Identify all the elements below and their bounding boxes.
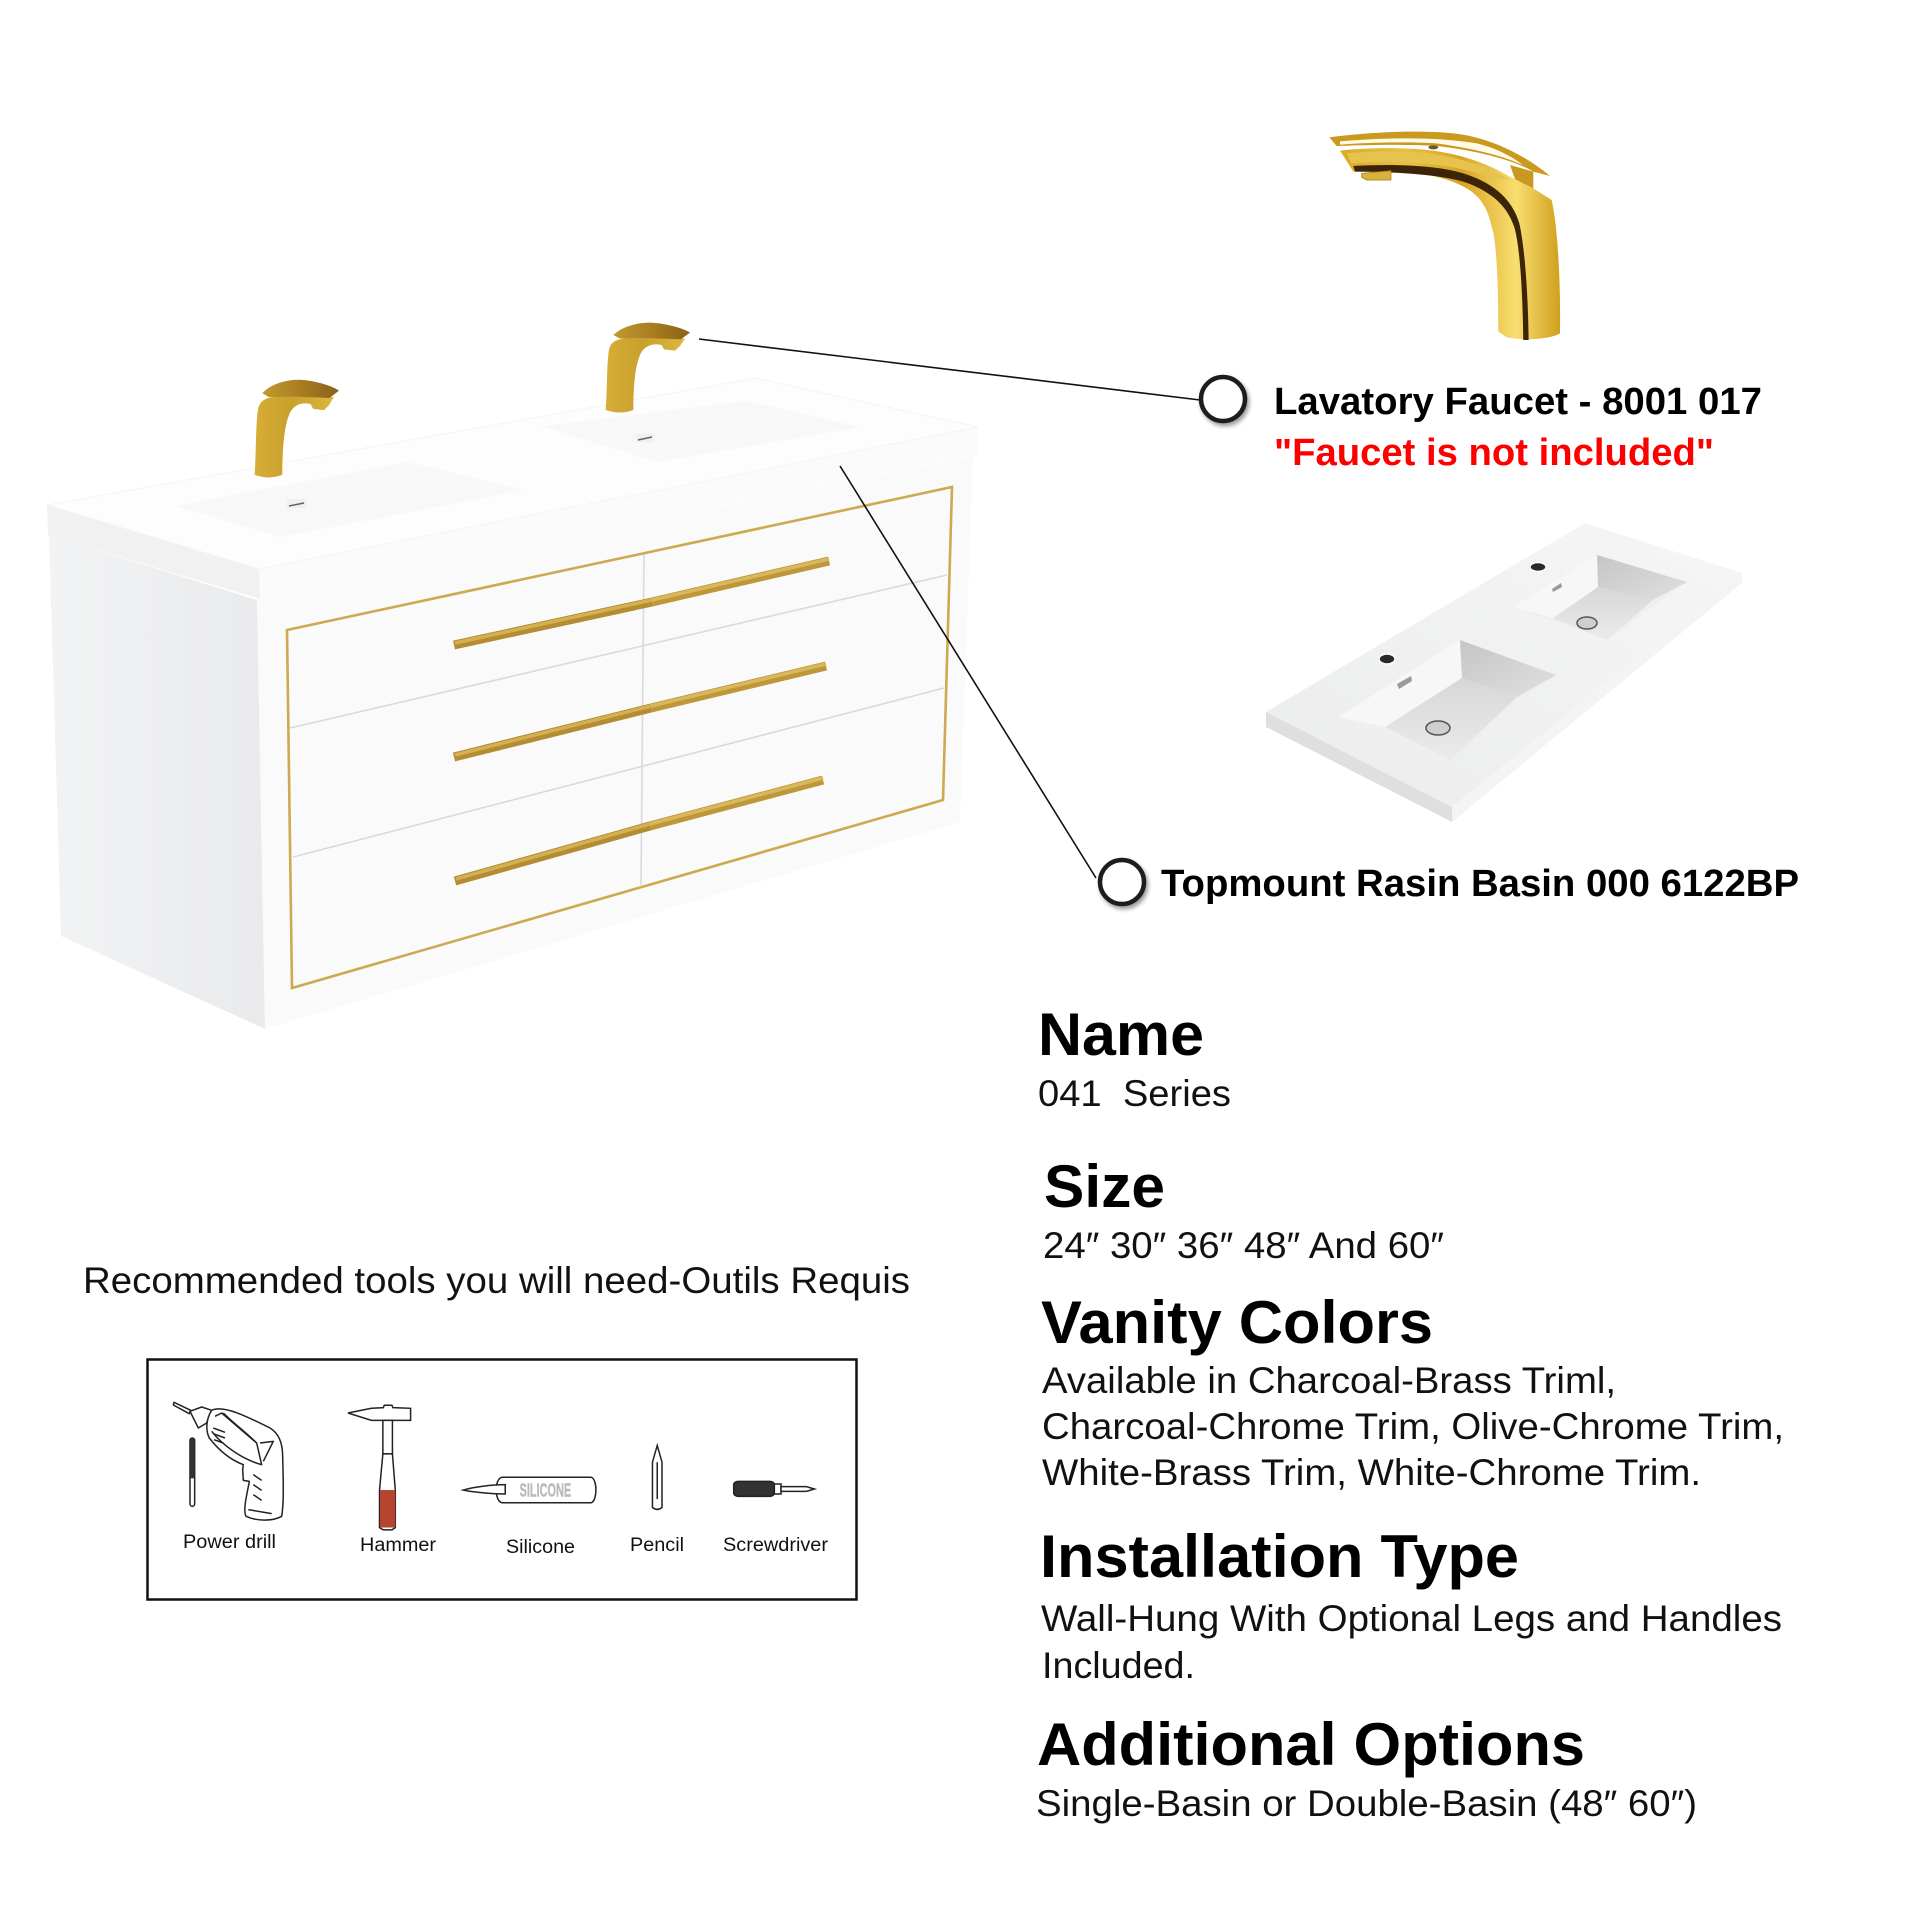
overflows	[1397, 583, 1562, 689]
tap holes	[1379, 562, 1546, 664]
installation type heading: Installation Type	[1040, 1523, 1519, 1590]
size heading: Size	[1044, 1153, 1165, 1220]
callout circle: faucet	[1201, 377, 1245, 421]
size value: 24″ 30″ 36″ 48″ And 60″	[1043, 1225, 1444, 1266]
tool label: silicone: Silicone	[506, 1537, 575, 1558]
vanity cabinet	[47, 323, 978, 1029]
tool label: screwdriver: Screwdriver	[723, 1535, 829, 1556]
faucet spout highlight	[1347, 151, 1510, 180]
vanity colors text	[1042, 1360, 1784, 1493]
basin B back wall	[1597, 555, 1687, 600]
drawer handles	[454, 559, 829, 881]
installation type text: Wall-Hung With Optional Legs and Handles	[1041, 1598, 1782, 1639]
basin label: Topmount Rasin Basin 000 6122BP	[1161, 863, 1799, 905]
gold trim frame	[287, 487, 952, 988]
icon: pencil	[652, 1445, 662, 1509]
installation type text: Included.	[1042, 1645, 1195, 1686]
right overflow	[636, 434, 654, 442]
faucet lever	[1329, 132, 1550, 176]
lever screw	[1428, 145, 1438, 149]
faucet neck	[1510, 165, 1533, 190]
faucet left	[255, 380, 339, 477]
basin A back wall	[1460, 640, 1556, 697]
basin A	[1338, 640, 1556, 760]
tools frame	[148, 1360, 856, 1600]
vanity colors heading: Vanity Colors	[1041, 1289, 1433, 1356]
vanity colors text: Available in Charcoal-Brass Triml,	[1042, 1360, 1616, 1401]
drawer dividers	[290, 554, 947, 885]
tool label: hammer: Hammer	[360, 1535, 437, 1556]
double basin top product photo	[1266, 523, 1742, 822]
faucet not included note: "Faucet is not included"	[1274, 432, 1714, 474]
faucet body	[1340, 148, 1560, 339]
tool label: power drill: Power drill	[183, 1532, 276, 1553]
countertop right front edge	[259, 427, 978, 599]
countertop surface	[47, 378, 978, 569]
right basin recess	[542, 401, 861, 462]
additional options heading: Additional Options	[1037, 1711, 1585, 1778]
icon: silicone tube: SILICONE	[520, 1480, 571, 1501]
cabinet left side	[49, 535, 265, 1029]
countertop front edge	[47, 427, 978, 599]
icon: silicone tube	[463, 1477, 596, 1503]
leader line: basin	[840, 466, 1096, 878]
faucet dark reflection	[1353, 165, 1529, 340]
icon: hammer	[348, 1405, 411, 1530]
icon: screwdriver	[734, 1481, 814, 1496]
basin B left slope	[1513, 555, 1598, 618]
additional options text: Single-Basin or Double-Basin (48″ 60″)	[1036, 1783, 1697, 1824]
basin A floor	[1385, 678, 1517, 760]
vanity colors text: Charcoal-Chrome Trim, Olive-Chrome Trim,	[1042, 1406, 1784, 1447]
lever highlight	[1340, 138, 1523, 165]
slab right edge	[1452, 573, 1742, 822]
gold faucet product photo	[1329, 132, 1560, 340]
basin B	[1513, 555, 1687, 640]
name value: 041 Series	[1038, 1073, 1231, 1114]
drains	[1426, 617, 1597, 735]
left basin recess	[175, 462, 523, 537]
faucet aerator	[1362, 171, 1391, 180]
basin B floor	[1553, 587, 1653, 640]
slab left edge	[1266, 712, 1452, 822]
icon: power drill	[173, 1402, 283, 1520]
faucet right	[606, 323, 690, 412]
installation type text	[1041, 1598, 1782, 1686]
slab top	[1266, 523, 1742, 807]
left overflow	[287, 499, 307, 508]
callout circle: basin	[1100, 860, 1144, 904]
tools heading: Recommended tools you will need-Outils Requis	[83, 1260, 910, 1301]
basin A left slope	[1338, 640, 1462, 727]
leader line: faucet	[699, 339, 1200, 400]
panel: tools	[148, 1360, 856, 1600]
faucet label: Lavatory Faucet - 8001 017	[1274, 381, 1762, 423]
vanity colors text: White-Brass Trim, White-Chrome Trim.	[1042, 1452, 1701, 1493]
name heading: Name	[1038, 1001, 1204, 1068]
tool label: pencil: Pencil	[630, 1535, 684, 1556]
cabinet front	[257, 457, 973, 1029]
